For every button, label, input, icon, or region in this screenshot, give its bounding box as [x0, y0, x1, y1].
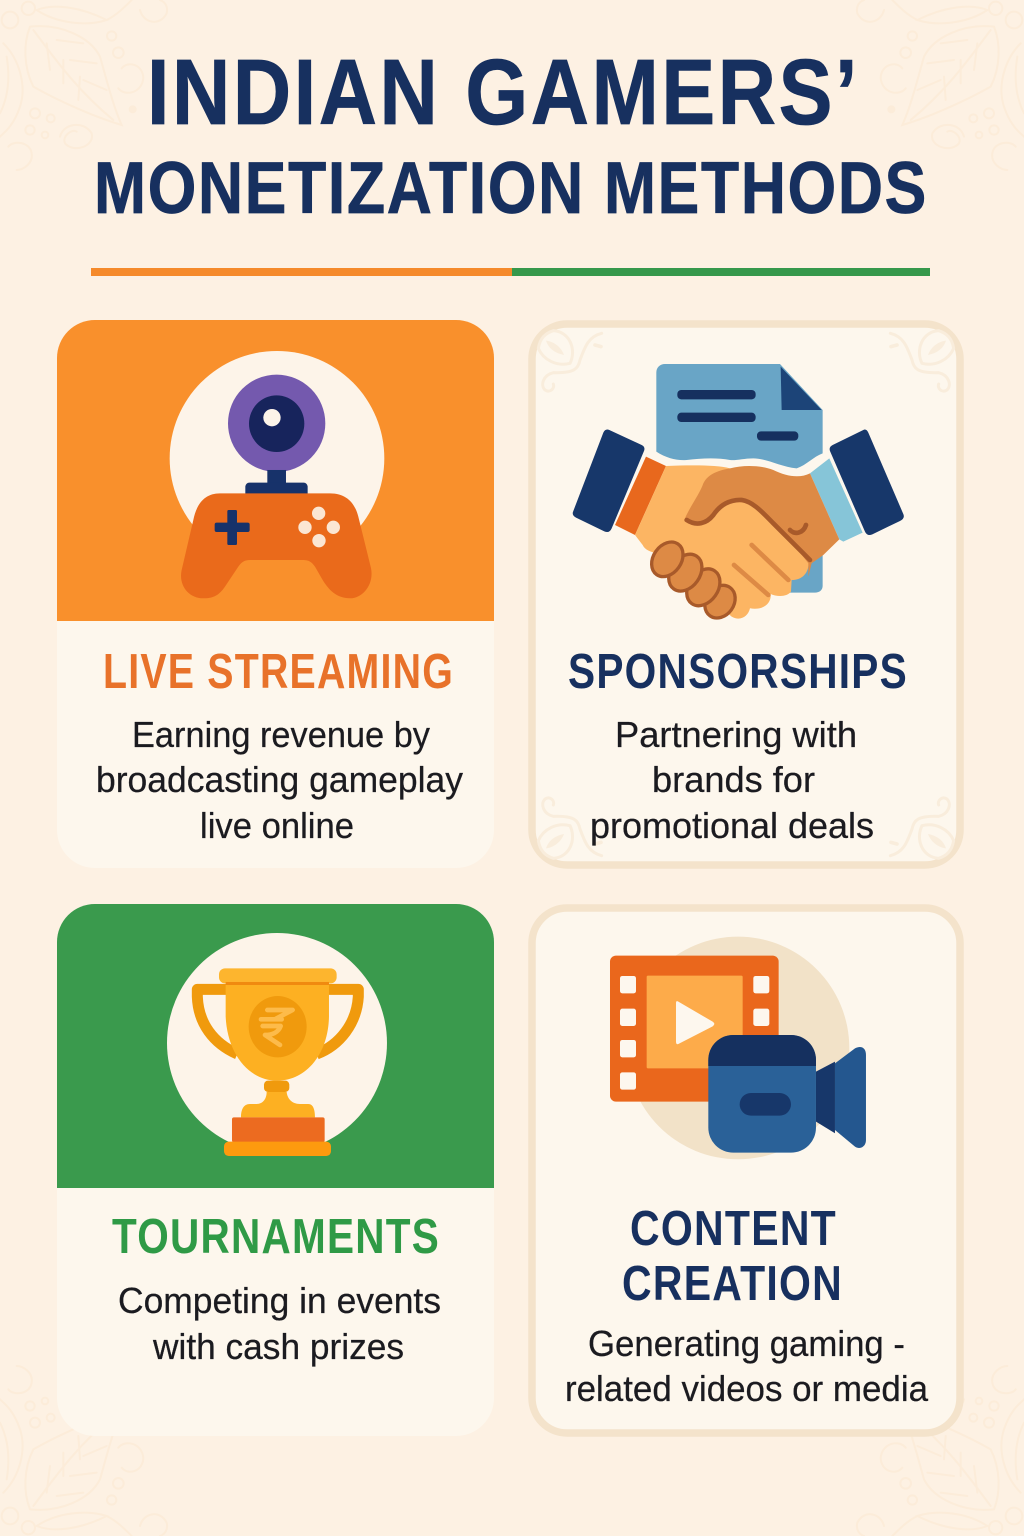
- title: [94, 40, 928, 229]
- heading: content creation: [622, 1202, 843, 1311]
- description: content creation: related videos or media: [565, 1368, 929, 1409]
- title: INDIAN GAMERS’: [147, 40, 860, 144]
- description: live streaming: broadcasting gameplay: [96, 759, 463, 800]
- description: tournaments: [118, 1280, 441, 1367]
- card corner ornaments: [538, 331, 954, 858]
- icon: webcam and game controller: [170, 351, 384, 598]
- description: live streaming: live online: [200, 805, 354, 846]
- description: sponsorships: [590, 714, 874, 846]
- panel: tournaments: [57, 904, 494, 1436]
- heading: content creation: CONTENT: [630, 1202, 837, 1256]
- description: live streaming: [96, 714, 463, 846]
- icon: handshake over contract: [573, 364, 904, 624]
- description: content creation: Generating gaming -: [588, 1323, 905, 1364]
- description: tournaments: with cash prizes: [152, 1326, 404, 1367]
- heading: tournaments: TOURNAMENTS: [112, 1210, 440, 1264]
- heading: live streaming: LIVE STREAMING: [103, 645, 454, 699]
- divider: [91, 268, 930, 276]
- description: live streaming: Earning revenue by: [132, 714, 430, 755]
- description: sponsorships: brands for: [652, 759, 815, 800]
- panel: live streaming: [57, 320, 494, 868]
- heading: content creation: CREATION: [622, 1257, 843, 1311]
- description: tournaments: Competing in events: [118, 1280, 441, 1321]
- icon: film strip and video camera: [610, 937, 866, 1159]
- description: sponsorships: Partnering with: [615, 714, 857, 755]
- panel: sponsorships: [532, 324, 960, 865]
- description: sponsorships: promotional deals: [590, 805, 874, 846]
- description: content creation: [565, 1323, 929, 1409]
- panel: content creation: [532, 908, 960, 1433]
- heading: sponsorships: SPONSORSHIPS: [568, 645, 908, 699]
- icon: trophy with rupee: [167, 933, 387, 1156]
